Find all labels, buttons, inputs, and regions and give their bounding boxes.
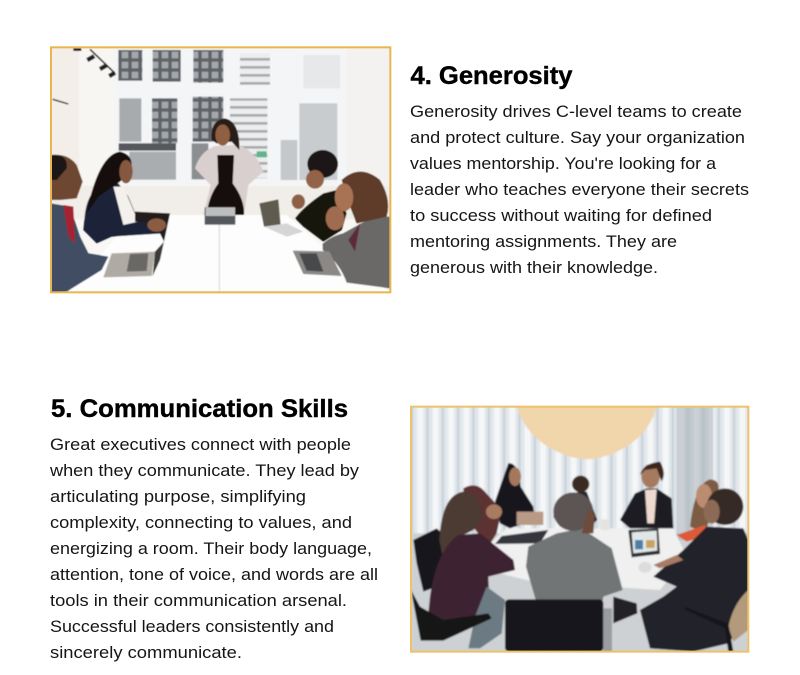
cup bbox=[601, 519, 609, 530]
photo: executives around a round table under a paper lantern bbox=[410, 406, 750, 653]
text block: communication skills description: when they communicate. They lead by bbox=[49, 461, 360, 480]
text block: generosity description: leader who teaches everyone their secrets bbox=[410, 180, 749, 199]
left chair and woman bbox=[412, 528, 444, 592]
text block: communication skills description: articulating purpose, simplifying bbox=[50, 487, 306, 506]
text block: generosity description: mentoring assignments. They are bbox=[410, 232, 677, 251]
back person bbox=[553, 492, 597, 527]
right man bbox=[640, 527, 748, 652]
light track bbox=[90, 49, 115, 73]
text block: communication skills description bbox=[49, 435, 378, 662]
text block: generosity description: Generosity drives C-level teams to create bbox=[410, 102, 742, 121]
text block: communication skills description: attention, tone of voice, and words are all bbox=[50, 565, 378, 584]
center laptop right bbox=[259, 199, 281, 227]
text block: communication skills description: sincerely communicate. bbox=[50, 643, 242, 662]
text block: communication skills description: energizing a room. Their body language, bbox=[50, 539, 372, 558]
grey man from behind bbox=[526, 528, 623, 607]
left man bbox=[51, 203, 108, 292]
table surface bbox=[68, 215, 390, 292]
text block: generosity description: values mentorship. You're looking for a bbox=[410, 154, 717, 173]
papers bbox=[495, 530, 548, 544]
front chair bbox=[505, 599, 603, 652]
text block: generosity description bbox=[410, 102, 749, 277]
text block: generosity description: to success without waiting for defined bbox=[410, 206, 712, 225]
heading: 4. Generosity: 4. Generosity bbox=[410, 62, 573, 90]
laptop right bbox=[293, 251, 342, 276]
back woman bbox=[495, 463, 535, 528]
text block: generosity description: generous with their knowledge. bbox=[410, 258, 658, 277]
text block: generosity description: and protect culture. Say your organization bbox=[410, 128, 745, 147]
table bbox=[490, 528, 687, 590]
lantern bbox=[517, 407, 657, 459]
laptop left bbox=[103, 252, 155, 277]
woman in grey blazer bbox=[323, 217, 390, 288]
woman with headwrap bbox=[295, 190, 347, 242]
woman in orange bbox=[690, 479, 719, 533]
photo: executive team meeting with woman standing at the table head bbox=[50, 46, 392, 294]
text block: communication skills description: tools in their communication arsenal. bbox=[50, 591, 347, 610]
text block: communication skills description: Successful leaders consistently and bbox=[50, 617, 334, 636]
heading: 5. Communication Skills: 5. Communication Skills bbox=[51, 395, 348, 423]
man in black suit bbox=[620, 488, 673, 528]
text block: communication skills description: Great executives connect with people bbox=[50, 435, 351, 454]
laptop bbox=[628, 528, 660, 557]
standing woman bbox=[195, 145, 263, 215]
woman in navy bbox=[83, 183, 163, 243]
text block: communication skills description: complexity, connecting to values, and bbox=[50, 513, 352, 532]
